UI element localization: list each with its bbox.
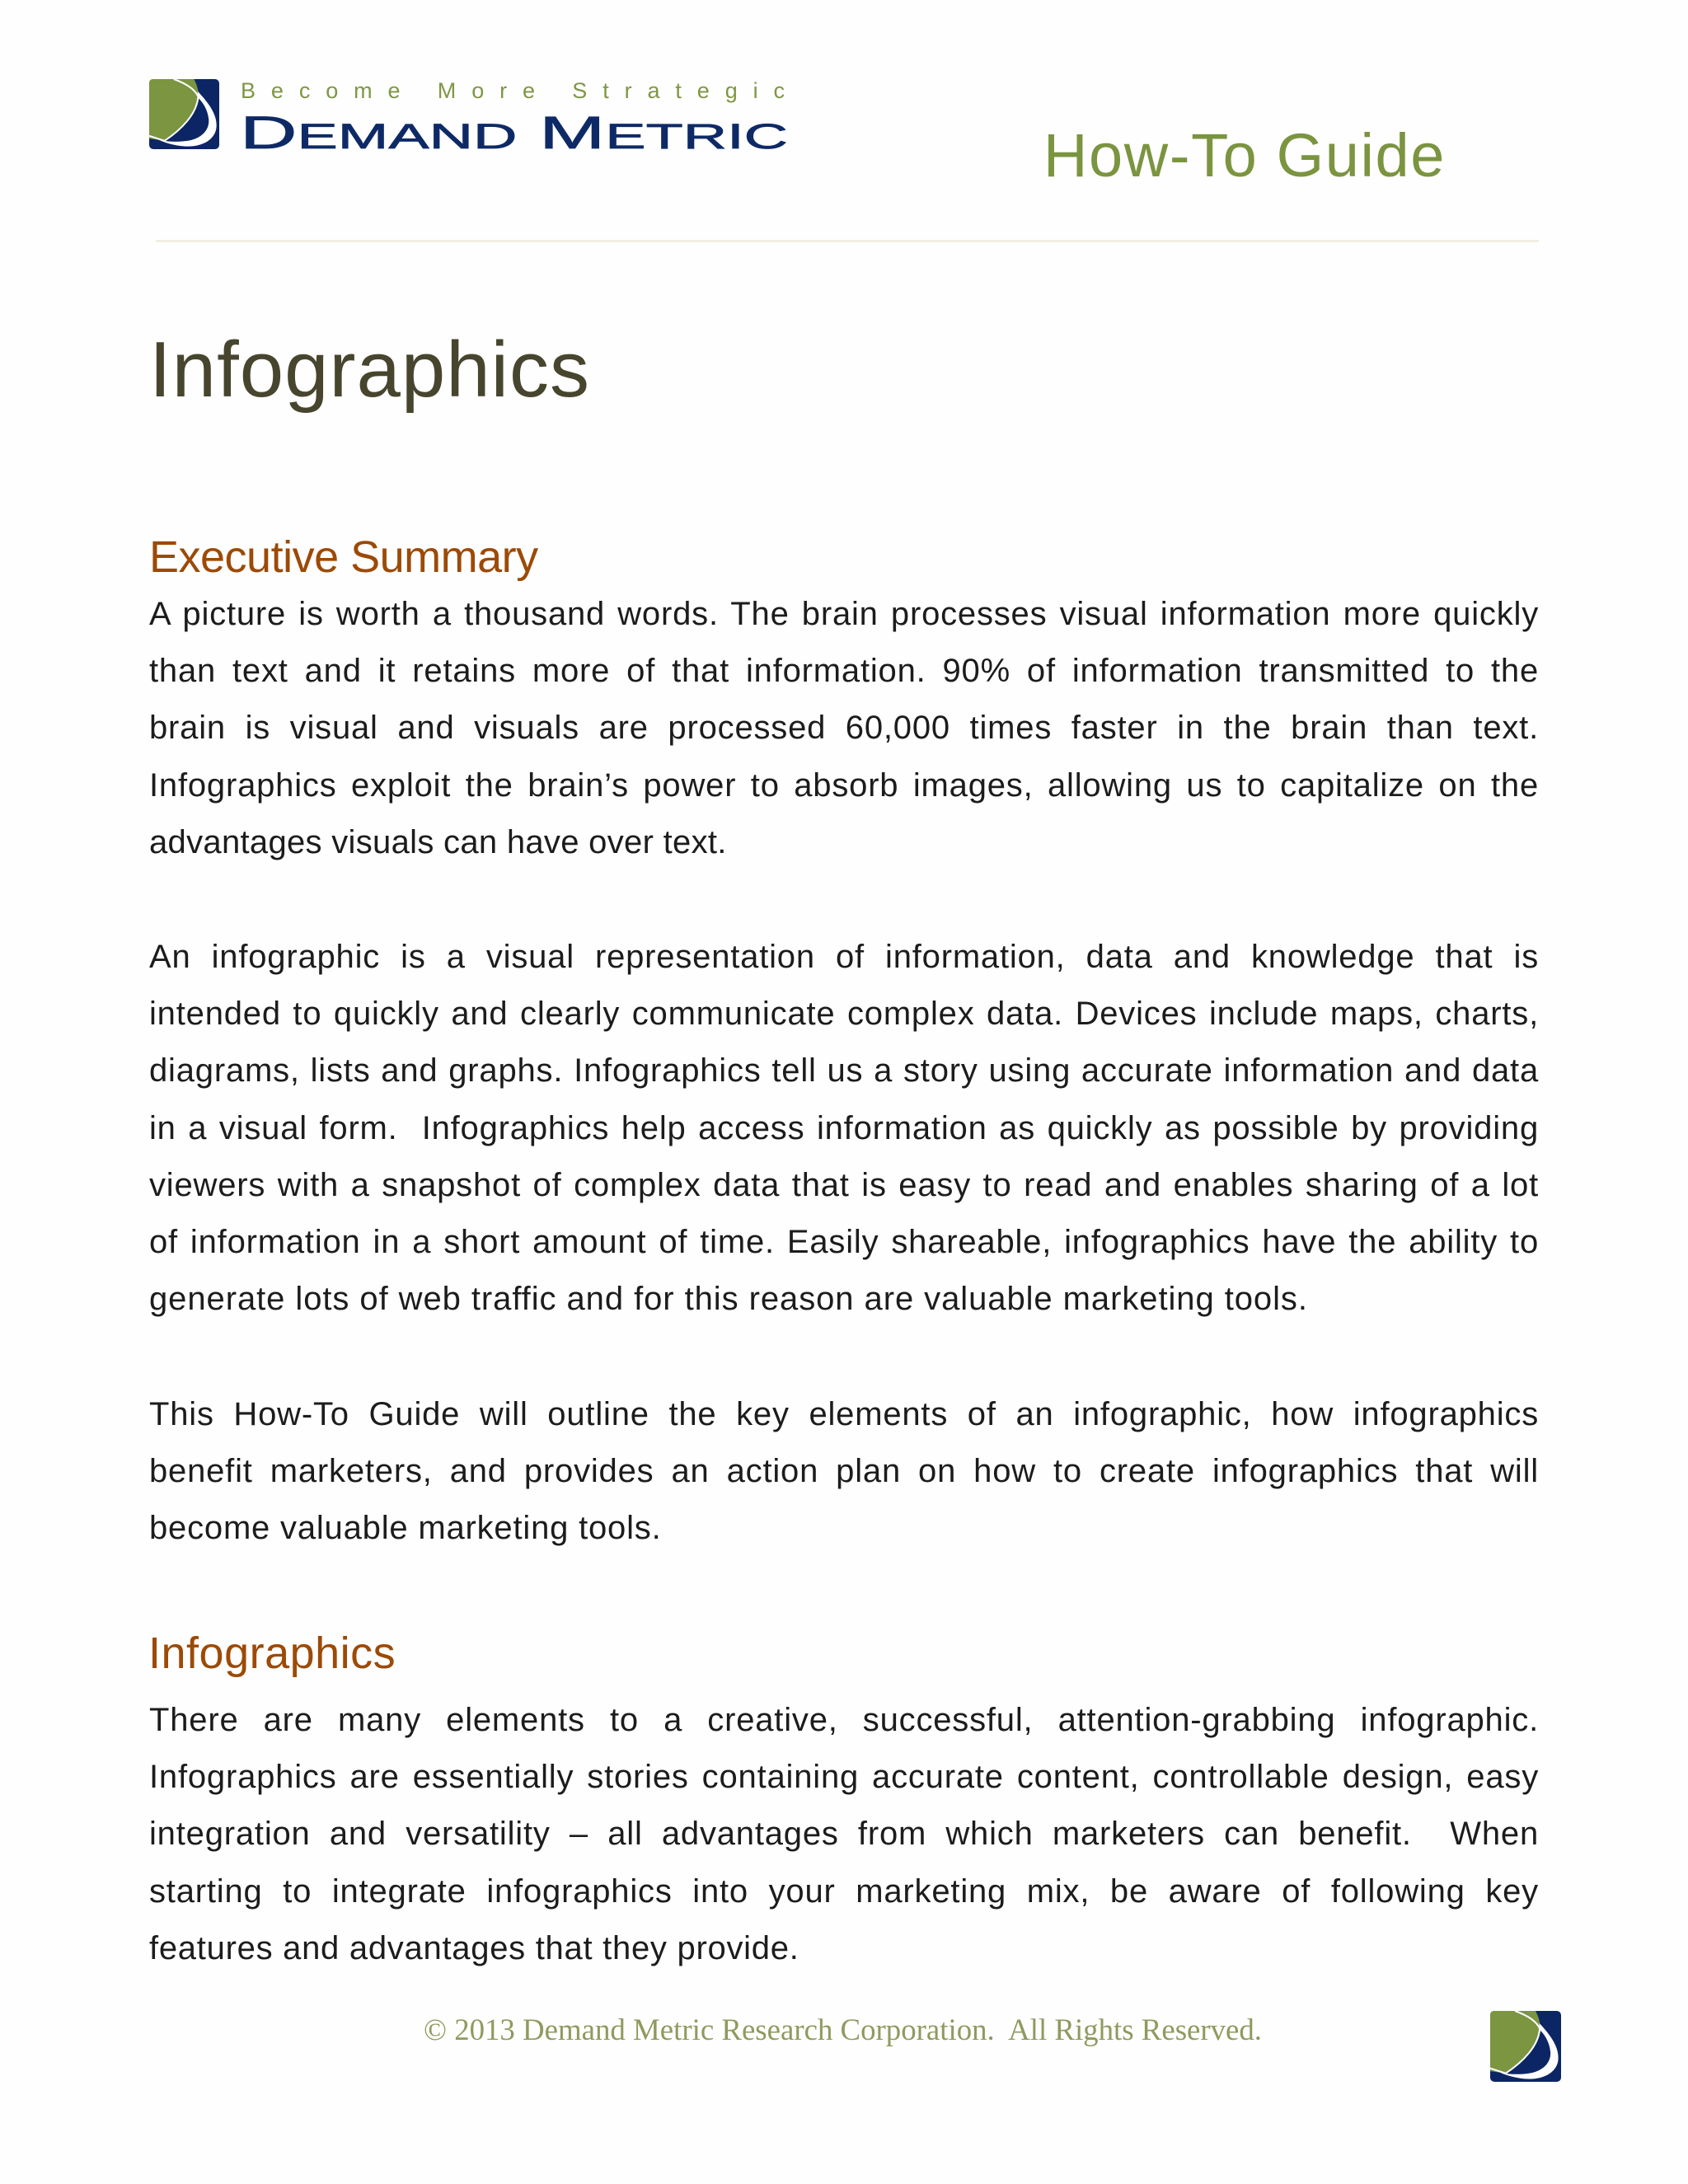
text block: summary paragraph 3: This How-To Guide will outline the key elements of an infographic, how infographics [149, 1396, 1539, 1432]
text block: summary paragraph 2: intended to quickly and clearly communicate complex data. Devices include maps, charts, [149, 996, 1539, 1032]
text block: summary paragraph 1: A picture is worth a thousand words. The brain processes visual information more quickly [149, 596, 1539, 632]
icon: logo mark [149, 79, 219, 149]
text block: Infographics section paragraph [149, 1702, 1539, 1966]
text block: summary paragraph 2: in a visual form. Infographics help access information as quickly as possible by providing [149, 1110, 1539, 1146]
text block: Infographics section paragraph: Infographics are essentially stories containing accurate content, controllable design, easy [149, 1759, 1539, 1795]
text block: Infographics section paragraph: starting to integrate infographics into your marketing mix, be aware of following key [149, 1873, 1539, 1910]
text block: summary paragraph 1: Infographics exploit the brain’s power to absorb images, allowing us to capitalize on the [149, 767, 1539, 804]
text block: summary paragraph 3: benefit marketers, and provides an action plan on how to create infographics that will [149, 1453, 1539, 1489]
heading: Infographics section: Infographics [148, 1629, 396, 1678]
text block: summary paragraph 3 [149, 1396, 1539, 1546]
text block: summary paragraph 2 [149, 939, 1539, 1317]
text block: summary paragraph 2: diagrams, lists and graphs. Infographics tell us a story using accurate information and data [149, 1052, 1539, 1089]
text block: summary paragraph 1 [149, 596, 1539, 860]
text block: summary paragraph 2: of information in a short amount of time. Easily shareable, infographics have the ability to [149, 1224, 1539, 1260]
text block: summary paragraph 2: An infographic is a visual representation of information, data and knowledge that is [149, 939, 1539, 975]
heading: How-To Guide: How-To Guide [1043, 121, 1446, 190]
icon: footer logo mark [1490, 2011, 1561, 2082]
text block: Infographics section paragraph: features and advantages that they provide. [149, 1930, 799, 1966]
text block: Infographics section paragraph: integration and versatility – all advantages from which marketers can benefit. When [149, 1816, 1539, 1852]
text block: summary paragraph 1: brain is visual and visuals are processed 60,000 times faster in the brain than text. [149, 710, 1539, 746]
text block: summary paragraph 2: viewers with a snapshot of complex data that is easy to read and enables sharing of a lot [149, 1167, 1539, 1203]
text block: summary paragraph 1: than text and it retains more of that information. 90% of information transmitted to the [149, 653, 1539, 689]
text block: summary paragraph 3: become valuable marketing tools. [149, 1510, 661, 1546]
text block: summary paragraph 2: generate lots of web traffic and for this reason are valuable marketing tools. [149, 1281, 1308, 1317]
title: Infographics [149, 326, 590, 414]
text block: summary paragraph 1: advantages visuals can have over text. [149, 824, 727, 860]
tagline: Become More Strategic [241, 78, 785, 103]
text block: Infographics section paragraph: There are many elements to a creative, successful, attention-grabbing infographic. [149, 1702, 1539, 1738]
footer copyright: © 2013 Demand Metric Research Corporation. All Rights Reserved. [424, 2013, 1262, 2046]
heading: Executive Summary: Executive Summary [149, 532, 538, 582]
header rule [156, 240, 1539, 242]
logo: Demand Metric header [148, 78, 788, 157]
